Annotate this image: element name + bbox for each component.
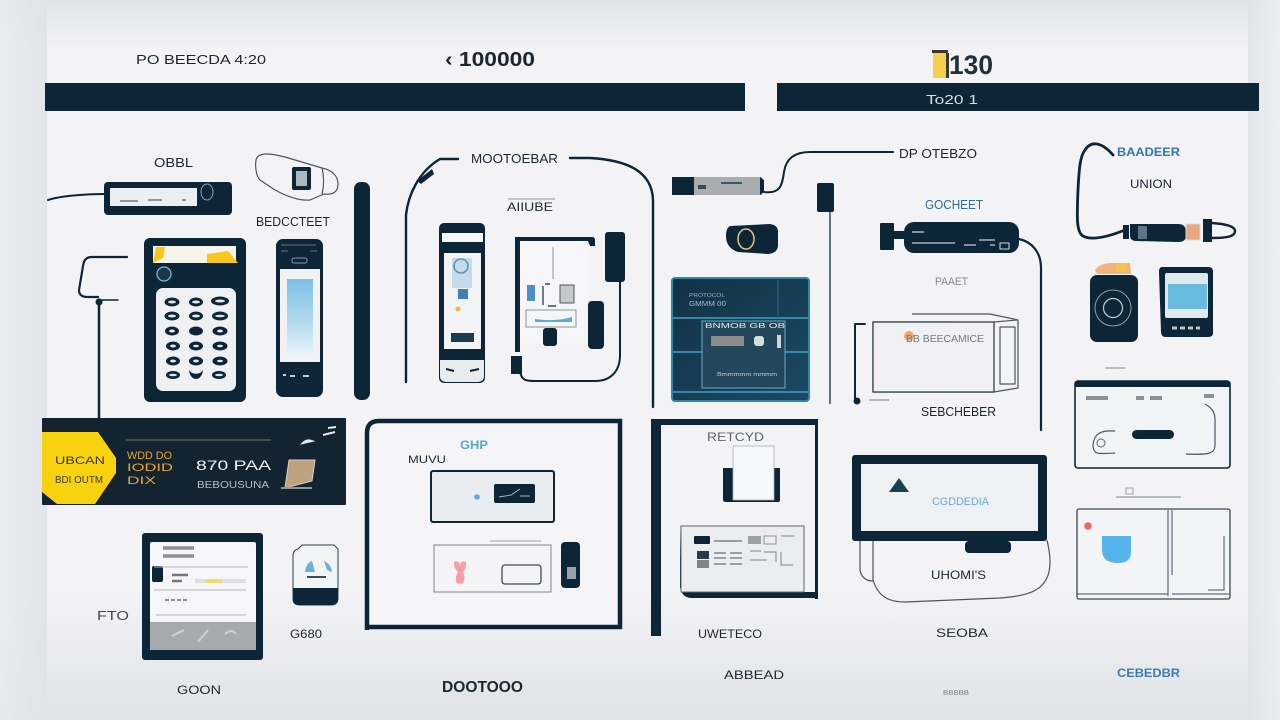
yellow hexagon badge: BDI OUTM	[55, 475, 103, 486]
device: router with cable	[880, 222, 1041, 430]
device: small jar icon	[293, 545, 338, 605]
screen card	[431, 471, 554, 522]
label DP OTEBZO: DP OTEBZO	[899, 147, 977, 161]
outlined card with pink symbol	[434, 541, 551, 592]
label MOOTOEBAR with bracket	[406, 152, 653, 407]
small caption: BBBBB	[943, 690, 969, 697]
label G680: G680	[290, 627, 322, 641]
panel: large framed unit	[367, 421, 620, 630]
device: monitor with tray	[852, 455, 1050, 602]
device: speaker	[1090, 263, 1138, 342]
white text block: BEBOUSUNA	[197, 480, 269, 491]
label AIIUBE: AIIUBE	[507, 200, 553, 214]
icon: hanging cable left	[79, 257, 127, 418]
label FTO: FTO	[97, 609, 129, 623]
header bar right	[777, 83, 1259, 111]
tan icon	[281, 460, 315, 488]
panel: open bracket unit	[651, 419, 818, 636]
header number right with yellow icon: 130	[949, 50, 993, 80]
device: folded panel with cable	[511, 232, 625, 381]
cable and connector top right	[1077, 144, 1235, 242]
header number center: ‹ 100000	[445, 49, 535, 71]
device: tablet	[142, 533, 263, 660]
banner: yellow hexagon panel	[42, 418, 346, 505]
yellow hexagon badge	[42, 432, 116, 504]
device: tall phone	[439, 223, 485, 383]
card: screen with pill	[1075, 368, 1230, 468]
table card	[680, 525, 818, 598]
label OBBL: OBBL	[154, 155, 193, 170]
panel: teal device: BNMOB GB OB	[705, 321, 785, 330]
label BEDCCTEET: BEDCCTEET	[256, 215, 330, 229]
label PAAET: PAAET	[935, 276, 968, 288]
label SEOBA: SEOBA	[936, 626, 988, 640]
device: touchscreen phone	[276, 239, 323, 397]
panel: teal device: Bmmmmm mmmm	[717, 372, 778, 378]
device: monitor with tray: UHOMI'S	[931, 568, 986, 582]
device: monitor with tray: CGDDEDIA	[932, 496, 990, 508]
small remote	[561, 542, 580, 588]
yellow text block: IODID	[127, 462, 173, 474]
yellow text block: DIX	[127, 475, 157, 487]
label DOOTOOO: DOOTOOO	[442, 679, 523, 696]
white text block: 870 PAA	[196, 457, 272, 473]
card: blue tile window	[1077, 488, 1230, 599]
device: box with bracket: BB BEECAMICE	[906, 334, 984, 345]
yellow hexagon badge: UBCAN	[55, 455, 105, 467]
label RETCYD: RETCYD	[707, 430, 764, 444]
label GOON: GOON	[177, 683, 221, 697]
device: box with bracket	[854, 314, 1018, 404]
label GHP: GHP	[460, 438, 488, 452]
panel: teal device: PROTOCOL	[689, 293, 725, 299]
header bar left	[45, 83, 745, 111]
white text block	[196, 457, 272, 491]
holder with paper	[723, 446, 780, 502]
label MUVU: MUVU	[408, 454, 446, 466]
icon: gold ring fob	[726, 224, 778, 254]
yellow text block: WDD DO	[127, 450, 172, 462]
label MOOTOEBAR with bracket: MOOTOEBAR	[471, 152, 558, 166]
panel: teal device: GMMM 00	[689, 301, 726, 308]
label CEBEDBR: CEBEDBR	[1117, 668, 1181, 680]
icon: line drawing device	[256, 154, 338, 200]
label UWETECO: UWETECO	[698, 627, 762, 641]
label SEBCHEBER: SEBCHEBER	[921, 405, 996, 419]
label ABBEAD: ABBEAD	[724, 668, 784, 682]
device: USB stick with cable	[672, 152, 893, 195]
label UNION: UNION	[1130, 177, 1172, 191]
device: small handheld	[1159, 267, 1213, 337]
header label left: PO BEECDA 4:20	[136, 52, 266, 67]
label BAADEER: BAADEER	[1117, 145, 1180, 159]
label GOCHEET: GOCHEET	[925, 198, 983, 212]
divider pill left	[354, 182, 370, 400]
header bar right: To20 1	[926, 92, 978, 107]
yellow text block	[127, 450, 173, 487]
device: keypad phone	[144, 238, 246, 402]
icon: hanging clip	[817, 183, 834, 404]
device: cabled reader	[48, 182, 232, 215]
panel: teal device	[672, 278, 809, 401]
